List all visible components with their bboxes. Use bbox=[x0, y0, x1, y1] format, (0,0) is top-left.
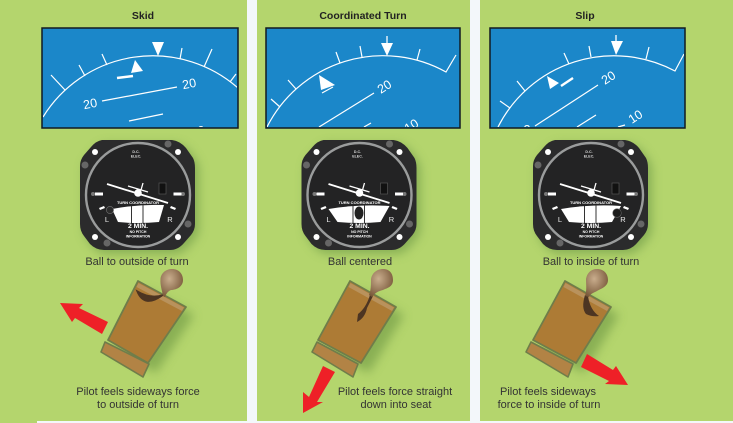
attitude display: skid bbox=[42, 28, 238, 138]
ball bbox=[613, 209, 621, 217]
instrument: skid turn coordinator: TURN COORDINATOR bbox=[117, 200, 159, 205]
instrument: slip turn coordinator: 2 MIN. bbox=[581, 223, 601, 230]
instrument: slip turn coordinator: L bbox=[558, 215, 562, 224]
heading: Slip: Slip bbox=[575, 10, 595, 22]
instrument: skid turn coordinator: INFORMATION bbox=[126, 234, 151, 238]
caption: force skid: to outside of turn bbox=[97, 399, 179, 411]
heading: Skid: Skid bbox=[132, 10, 154, 22]
attitude display: coordinated turn: 20 bbox=[375, 77, 394, 96]
control stick: coordinated bbox=[312, 269, 404, 377]
instrument: slip turn coordinator: D.C. bbox=[585, 150, 593, 154]
attitude display: slip: 20 bbox=[599, 68, 618, 87]
bottom strip bbox=[37, 421, 733, 423]
instrument: slip turn coordinator: R bbox=[620, 215, 626, 224]
instrument: slip turn coordinator: ELEC. bbox=[584, 154, 594, 158]
caption: force coordinated: down into seat bbox=[361, 399, 431, 411]
control stick: skid bbox=[101, 269, 194, 377]
attitude display: coordinated turn: 10 bbox=[402, 116, 421, 135]
instrument: coordinated turn coordinator: NO PITCH bbox=[351, 230, 368, 234]
caption: force slip: Pilot feels sideways bbox=[500, 386, 596, 398]
heading: Coordinated Turn: Coordinated Turn bbox=[319, 10, 407, 22]
instrument: skid turn coordinator bbox=[80, 140, 199, 254]
caption: ball slip: Ball to inside of turn bbox=[543, 256, 639, 268]
instrument: slip turn coordinator bbox=[533, 140, 652, 254]
caption: force skid bbox=[76, 386, 200, 411]
instrument: skid turn coordinator: R bbox=[167, 215, 173, 224]
attitude display: coordinated turn bbox=[266, 28, 460, 135]
instrument: slip turn coordinator: INFORMATION bbox=[579, 234, 604, 238]
attitude display: slip: 10 bbox=[626, 107, 645, 126]
ball bbox=[354, 206, 364, 220]
instrument: skid turn coordinator: 2 MIN. bbox=[128, 223, 148, 230]
caption: ball skid: Ball to outside of turn bbox=[85, 256, 189, 268]
caption: force coordinated: Pilot feels force straight bbox=[338, 386, 452, 398]
instrument: coordinated turn coordinator: D.C. bbox=[354, 150, 361, 154]
panel: coordinated turn bbox=[257, 0, 470, 423]
control stick: slip bbox=[526, 269, 619, 377]
attitude display: slip bbox=[490, 28, 685, 137]
caption: force coordinated bbox=[338, 386, 452, 411]
instrument: skid turn coordinator: NO PITCH bbox=[130, 230, 147, 234]
attitude display: skid: 20 bbox=[82, 96, 98, 112]
instrument: coordinated turn coordinator: ELEC. bbox=[352, 154, 363, 158]
instrument: coordinated turn coordinator: R bbox=[389, 215, 395, 224]
panel: slip bbox=[480, 0, 733, 423]
instrument: slip turn coordinator: NO PITCH bbox=[583, 230, 600, 234]
instrument: skid turn coordinator: L bbox=[105, 215, 109, 224]
attitude display: skid: 20 bbox=[181, 76, 197, 92]
panel: skid bbox=[0, 0, 247, 423]
instrument: coordinated turn coordinator: INFORMATION bbox=[347, 234, 372, 238]
instrument: coordinated turn coordinator: TURN COORDINATOR bbox=[338, 200, 381, 205]
instrument: coordinated turn coordinator bbox=[302, 140, 420, 254]
caption: ball coordinated: Ball centered bbox=[328, 256, 392, 268]
arrow: skid force bbox=[60, 303, 108, 334]
attitude display: skid: 0 bbox=[198, 124, 205, 138]
ball bbox=[106, 206, 114, 214]
instrument: slip turn coordinator: TURN COORDINATOR bbox=[570, 200, 612, 205]
arrow: coordinated force bbox=[303, 366, 335, 413]
instrument: coordinated turn coordinator: 2 MIN. bbox=[349, 223, 370, 230]
attitude display: slip: 2 bbox=[524, 123, 531, 137]
instrument: skid turn coordinator: D.C. bbox=[132, 150, 140, 154]
arrow: slip force bbox=[581, 354, 628, 385]
instrument: skid turn coordinator: ELEC. bbox=[131, 154, 141, 158]
caption: force slip: force to inside of turn bbox=[498, 399, 600, 411]
instrument: coordinated turn coordinator: L bbox=[326, 215, 331, 224]
caption: force slip bbox=[498, 386, 600, 411]
caption: force skid: Pilot feels sideways force bbox=[76, 386, 200, 398]
